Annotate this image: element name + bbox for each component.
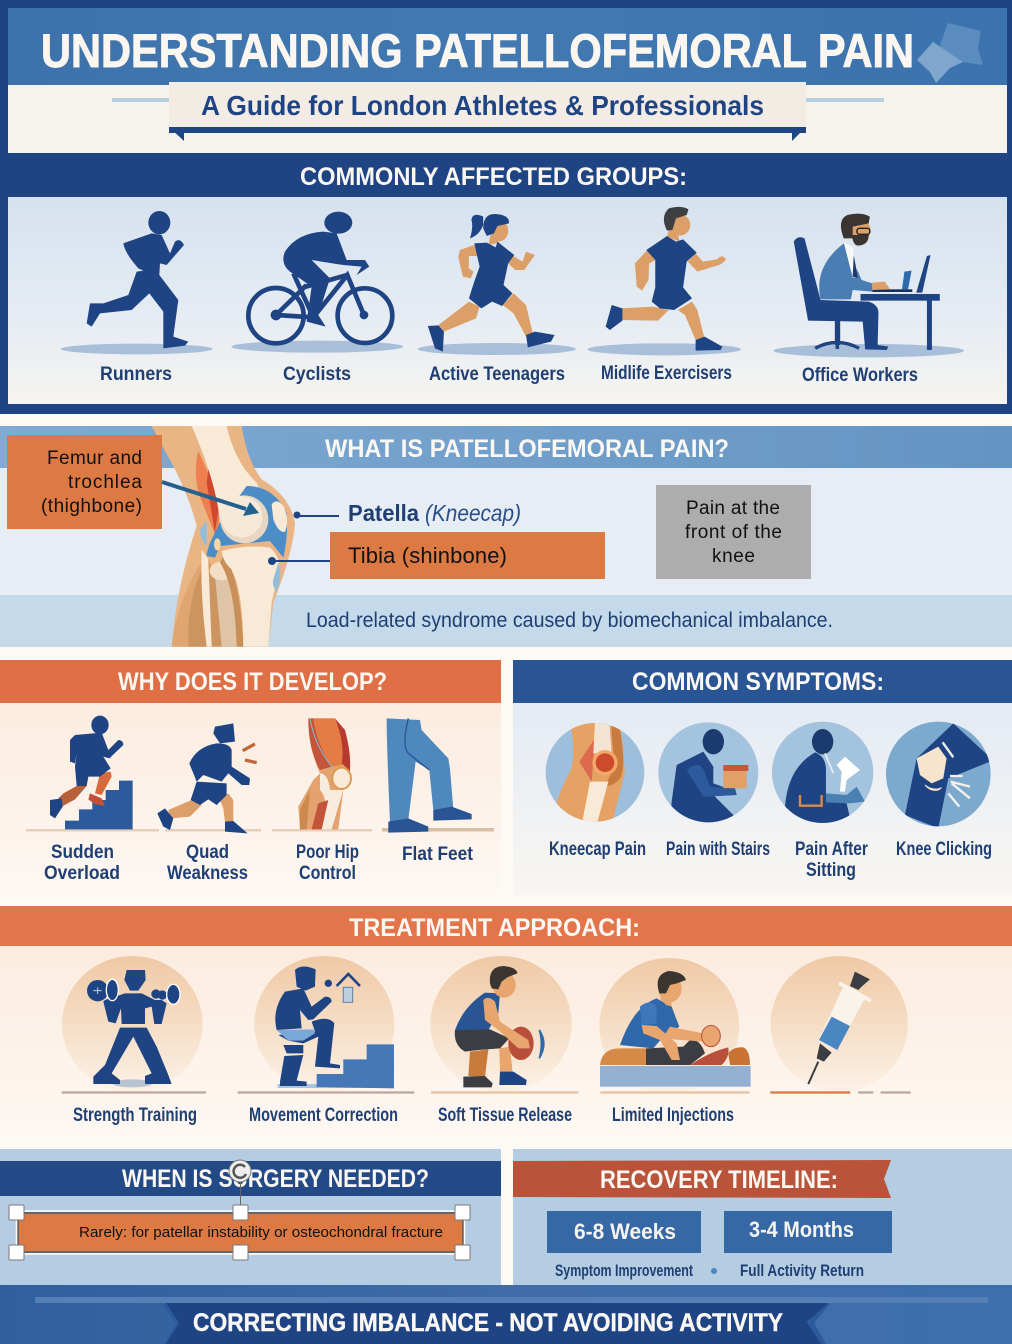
icon: midlife exerciser (587, 207, 741, 355)
heading: TREATMENT APPROACH: (349, 914, 640, 942)
label: patella (348, 500, 521, 526)
subtitle: A Guide for London Athletes & Professionals (201, 90, 764, 121)
label: weakness: Weakness (167, 863, 248, 884)
label: runners: Runners (100, 364, 172, 385)
heading: WHAT IS PATELLOFEMORAL PAIN? (325, 435, 729, 463)
timeline box: 6-8 weeks (547, 1211, 701, 1253)
definition text: Load-related syndrome caused by biomechanical imbalance. (306, 609, 833, 632)
label: sitting: Sitting (806, 860, 856, 881)
tibia callout: Tibia (shinbone) (348, 543, 507, 568)
icon: runner (61, 211, 213, 354)
icon: pain with stairs (657, 720, 760, 827)
panel: why does it develop (0, 660, 501, 895)
panel: recovery timeline (513, 1149, 1012, 1285)
icon: poor hip control (298, 718, 351, 829)
heading: commonly affected groups: COMMONLY AFFECTED GROUPS: (300, 163, 687, 191)
selection handles (9, 1160, 470, 1260)
pain location callout (656, 485, 811, 579)
label: soft tissue release: Soft Tissue Release (438, 1105, 572, 1126)
panel: what is patellofemoral pain (0, 426, 1012, 647)
label: office workers: Office Workers (802, 365, 918, 386)
footer banner (162, 1303, 830, 1344)
label: cyclists: Cyclists (283, 364, 351, 385)
surgery callout (16, 1211, 464, 1254)
icon: cyclist (231, 212, 403, 353)
label: limited injections: Limited Injections (612, 1105, 734, 1126)
timeline box: 3-4 months: 3-4 Months (749, 1217, 854, 1242)
label: overload: Overload (44, 863, 120, 884)
panel: common symptoms (513, 660, 1012, 895)
label: sudden: Sudden (51, 842, 114, 863)
timeline dot (711, 1268, 717, 1274)
icon: pain after sitting (770, 720, 875, 827)
panel: affected groups (8, 197, 1007, 404)
label: active teenagers: Active Teenagers (429, 364, 565, 385)
pain location callout: front of the (685, 522, 782, 543)
label: control: Control (299, 863, 356, 884)
surgery callout: Rarely: for patellar instability or osteochondral fracture (79, 1225, 443, 1241)
label: midlife exercisers: Midlife Exercisers (601, 363, 732, 384)
timeline box: 3-4 months (724, 1211, 892, 1253)
label: patella: Patella (348, 500, 419, 526)
icon: knee clicking (883, 720, 993, 830)
footer band (0, 1285, 1012, 1344)
ribbon heading: RECOVERY TIMELINE: (600, 1166, 838, 1194)
icon: strength training (62, 956, 206, 1094)
subtitle band (8, 82, 1007, 153)
icon: sudden overload (50, 716, 133, 829)
heading: COMMON SYMPTOMS: (632, 668, 884, 696)
label: quad: Quad (186, 842, 229, 863)
heading: WHEN IS SURGERY NEEDED? (122, 1165, 429, 1193)
pain location callout: knee (712, 546, 755, 567)
label: kneecap pain: Kneecap Pain (549, 839, 646, 860)
femur callout: (thighbone) (41, 496, 142, 517)
icon: movement correction (238, 956, 414, 1094)
icon: office worker (773, 214, 964, 357)
icon: quad weakness (157, 723, 257, 833)
label: poor hip: Poor Hip (296, 842, 359, 863)
label: movement correction: Movement Correction (249, 1105, 398, 1126)
icon: limited injections (599, 958, 751, 1094)
icon: syringe (770, 956, 911, 1094)
arrow: femur pointer (162, 482, 259, 516)
icon: flat feet (387, 718, 472, 833)
label: patella: (Kneecap) (425, 500, 521, 526)
heading: WHY DOES IT DEVELOP? (118, 668, 387, 696)
label: pain with stairs: Pain with Stairs (666, 839, 770, 860)
femur callout: trochlea (68, 472, 142, 493)
label: full activity return: Full Activity Return (740, 1262, 864, 1280)
panel: treatment approach (0, 906, 1012, 1138)
label: pain after: Pain After (795, 839, 868, 860)
label: strength training: Strength Training (73, 1105, 197, 1126)
icon: soft tissue release (430, 956, 578, 1094)
label: flat feet: Flat Feet (402, 844, 474, 865)
icon: knee anatomy (152, 426, 295, 647)
timeline box: 6-8 weeks: 6-8 Weeks (574, 1219, 676, 1244)
icon: active teenager (417, 214, 576, 355)
pain location callout: Pain at the (686, 498, 780, 519)
ribbon heading (513, 1160, 891, 1198)
icon: kneecap pain (546, 723, 644, 822)
tibia leader line (268, 557, 332, 565)
label: symptom improvement: Symptom Improvement (555, 1262, 693, 1280)
title band (8, 8, 1007, 85)
tibia callout (330, 532, 605, 579)
footer banner: CORRECTING IMBALANCE - NOT AVOIDING ACTIVITY (193, 1309, 783, 1337)
patella leader line (294, 512, 339, 518)
navy frame: header and groups (0, 0, 1012, 414)
panel: when is surgery needed (0, 1149, 501, 1285)
title: UNDERSTANDING PATELLOFEMORAL PAIN (41, 24, 914, 77)
femur callout: Femur and (47, 448, 142, 469)
femur callout (7, 435, 162, 529)
